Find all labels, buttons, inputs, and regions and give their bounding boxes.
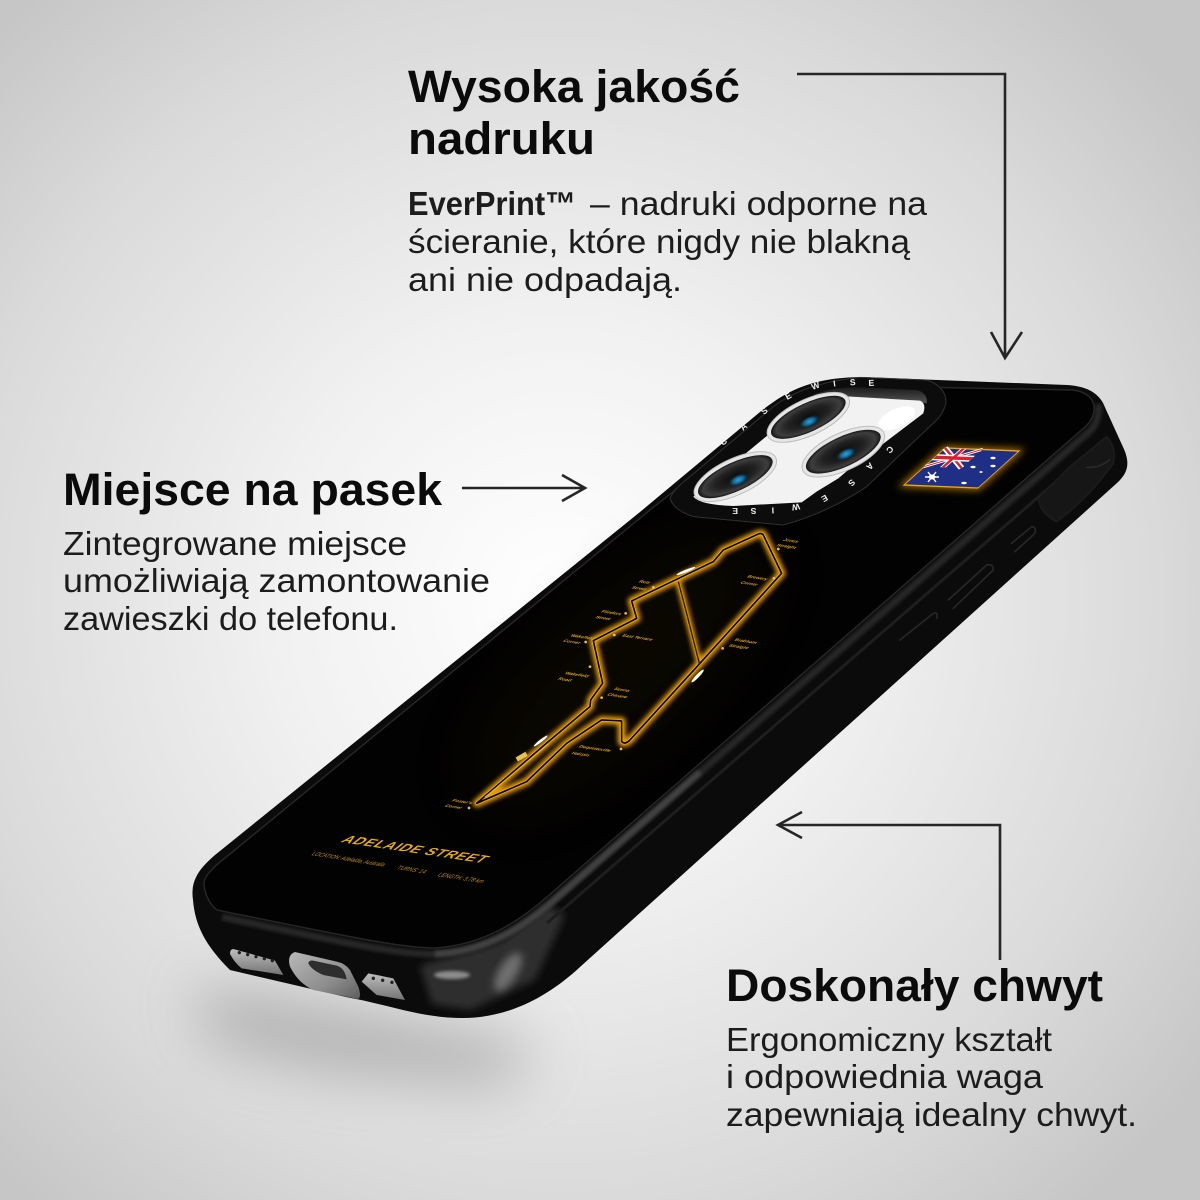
corner labels: Dequetteville: [577, 745, 613, 753]
side buttons: [900, 437, 1114, 640]
track highlights: [533, 566, 705, 747]
heading: nadruku: [408, 113, 595, 164]
left speaker: [230, 949, 283, 975]
corner labels: Corner: [738, 581, 759, 587]
corner dots: [468, 548, 780, 809]
race track map: [443, 534, 800, 810]
right speaker: [362, 973, 405, 1000]
corner labels: Road: [556, 677, 573, 683]
description: Ergonomiczny kształt: [726, 1021, 1052, 1058]
flag glow: [904, 448, 1019, 488]
description: umożliwiają zamontowanie: [63, 562, 490, 599]
lower rim highlight: [435, 772, 700, 954]
heading: Wysoka jakość: [408, 61, 740, 112]
flash: [875, 401, 919, 435]
corner labels: Foster's: [450, 799, 474, 806]
corner labels: Wakefield: [568, 634, 596, 641]
corner labels: Brewery: [745, 575, 770, 582]
track details: [310, 850, 487, 885]
amber panel tint: [432, 491, 808, 849]
description: – nadruki odporne na: [590, 185, 928, 222]
corner labels: Jones: [781, 538, 800, 544]
heading: Miejsce na pasek: [63, 464, 443, 515]
arrow: print quality: [797, 74, 1022, 358]
description: zapewniają idealny chwyt.: [726, 1096, 1137, 1133]
corner labels: Street: [593, 615, 612, 621]
corner labels: Flinders: [599, 610, 623, 617]
description: ani nie odpadają.: [408, 261, 682, 298]
brand ring upper: CASEWISE: [718, 377, 875, 448]
case side groove: [547, 467, 1073, 923]
camera glass: [693, 396, 924, 506]
camera bump: [670, 377, 946, 525]
track details: LOCATION: Adelaide, Australia: [310, 850, 389, 868]
corner labels: Senna: [612, 687, 631, 693]
phone shadow: [195, 985, 540, 1085]
start flag: [516, 752, 528, 761]
back panel: [204, 386, 1094, 948]
description: [63, 525, 490, 637]
flag stars: [925, 457, 996, 484]
phone case: [192, 377, 1127, 1018]
description: zawieszki do telefonu.: [63, 600, 398, 637]
inner bevel: [813, 387, 927, 403]
corner labels: Brabham: [732, 638, 759, 645]
case rim highlight: [222, 404, 1099, 954]
description: EverPrint™: [408, 185, 576, 222]
description: ścieranie, które nigdy nie blakną: [408, 223, 911, 260]
arrow: grip: [778, 812, 1000, 960]
track title: ADELAIDE STREET: [337, 834, 494, 866]
corner labels: Chicane: [605, 693, 629, 700]
callout: strap slot: [63, 464, 490, 637]
corner labels: Rutt: [637, 580, 652, 585]
description: [408, 185, 928, 298]
charging ports: [230, 949, 405, 1000]
heading: [408, 61, 740, 164]
case outer body: [192, 377, 1127, 1018]
corner labels: Corner: [561, 639, 582, 645]
brand ring lower: CASEWISE: [732, 444, 896, 516]
callout: print quality: [408, 61, 928, 298]
description: [726, 1021, 1137, 1133]
corner labels: Straight: [774, 543, 798, 550]
camera module: [670, 377, 946, 525]
corner labels: Hairpin: [569, 751, 591, 758]
flag field: [904, 448, 1019, 488]
corner labels: Corner: [443, 804, 464, 810]
arrow: strap slot: [462, 475, 585, 501]
corner labels: East Terrace: [620, 634, 654, 642]
track details: LENGTH: 3.78 km: [436, 871, 487, 885]
top lens: [760, 382, 856, 453]
flag: [904, 448, 1019, 488]
description: Zintegrowane miejsce: [63, 525, 407, 562]
corner labels: [443, 538, 800, 810]
track details: TURNS: 14: [395, 864, 429, 875]
left lens: [687, 441, 783, 512]
right lens: [795, 416, 892, 487]
track glow: [477, 534, 782, 803]
description: i odpowiednia waga: [726, 1058, 1044, 1095]
callout: grip: [726, 960, 1137, 1133]
corner labels: Wakefield: [563, 671, 590, 679]
heading: Doskonały chwyt: [726, 960, 1103, 1011]
USB port: [289, 952, 360, 999]
corner gloss: [420, 905, 565, 1010]
corner labels: Street: [629, 586, 648, 592]
track line: [477, 534, 782, 803]
corner labels: Straight: [727, 644, 750, 651]
